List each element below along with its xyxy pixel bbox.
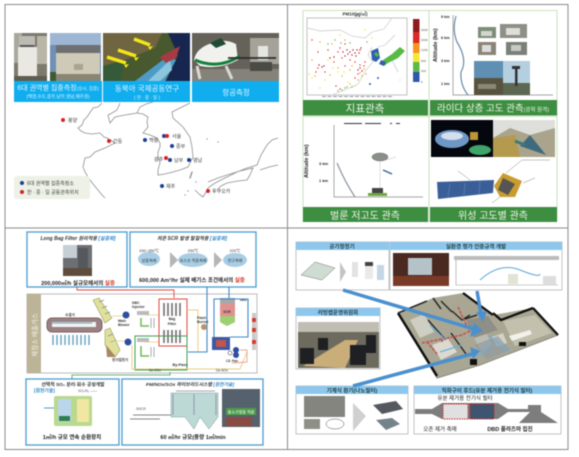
map: station markers: 영남	[193, 157, 203, 164]
box: low temperature SCR	[130, 232, 256, 287]
box: low temperature SCR: 220℃	[230, 248, 240, 253]
map: station markers: 제주	[166, 183, 176, 190]
box: long bag filter: 200,000㎥/h 실규모에서의 실증	[41, 279, 115, 287]
sinter machine: 전기집진기	[112, 357, 128, 362]
by-pass line: De-SOx	[149, 368, 161, 372]
burner and blue lines: Burner	[197, 320, 209, 324]
blowers and ducts	[112, 301, 159, 357]
label: surface observation: 지표관측	[346, 103, 385, 115]
bag filter	[159, 299, 187, 346]
label: six regional sites: (백령,수도,중부,남부,영남,제주권)	[26, 93, 90, 100]
box: air cleaner	[296, 242, 389, 290]
panel: indoor air quality	[296, 242, 562, 434]
box: selective SO2 separation: SO₂/N₂ ——	[78, 389, 98, 393]
illustration: apartment floor plan	[398, 293, 558, 378]
blowers and ducts: Main	[118, 319, 126, 323]
arrow head	[470, 347, 480, 359]
SCR reactor: SCR	[223, 310, 231, 314]
box: long bag filter: Long Bag Filter 원리적용 [실증화]	[40, 235, 116, 242]
box: PM NOx SOx hybrid dust collector: 60 ㎥/hr 규모(풍량 1㎥/min	[160, 433, 226, 441]
legend: PM colour scale: 1200	[421, 48, 428, 52]
blowers and ducts: Injector	[132, 305, 145, 309]
box: low temperature SCR: 상용촉매	[142, 257, 157, 263]
label: lidar upper-altitude observation: 라이다 상층 고도 관측(광학 원격)	[437, 104, 549, 114]
photo: measurement station tower	[14, 33, 47, 81]
legend: PM colour scale: 500	[421, 59, 426, 63]
map: station markers: 서울	[172, 133, 182, 140]
panel: observation methods	[303, 10, 557, 222]
arrow: bag filter feed	[77, 287, 174, 298]
legend	[14, 176, 90, 199]
box: low temperature SCR: 포스코 적용촉매	[180, 257, 207, 263]
box: real environment evaluation standard	[390, 242, 562, 290]
box: mechanical ventilation nanofilter: 기계식 환기(나노필터)	[327, 386, 378, 394]
legend: PM colour scale: 0	[421, 80, 423, 84]
arrow: air cleaner to plan	[343, 290, 474, 329]
box: mechanical ventilation nanofilter	[296, 386, 408, 434]
map: station markers: 광주	[154, 156, 164, 163]
chart: balloon altitude profile: Altitude (km)	[304, 144, 310, 178]
box: selective SO2 separation	[26, 372, 170, 445]
box: air cleaner: 공기청정기	[329, 242, 355, 250]
chart: balloon altitude profile: 3 km	[319, 161, 329, 166]
label: satellite observation: 위성 고도별 관측	[458, 209, 528, 222]
chart: surface PM map: PM10(㎍/㎥)	[342, 10, 368, 18]
box: low temperature SCR: 저온 SCR 발생 탈질적용 [실증화]	[157, 235, 227, 242]
sinter machine	[47, 298, 128, 362]
box: kitchen hood electric filter: DBD 플라즈마 집진	[487, 425, 533, 433]
label: East Asia joint research: ( 한 · 중 · 일 )	[134, 94, 160, 100]
box: low temperature SCR: 330~350℃	[139, 248, 159, 253]
by-pass line	[132, 310, 247, 372]
box: selective SO2 separation: 선택적 SO₂ 분리·회수 공정개발	[41, 381, 105, 388]
map: station markers	[61, 117, 231, 195]
box: kitchen hood electric filter: 직화구이 후드(유분 제거용 전기식 필터)	[442, 386, 533, 394]
photo: East Asia transport satellite map	[103, 33, 190, 81]
box: PM NOx SOx hybrid dust collector: 충소가열용 적용	[228, 408, 255, 414]
illustration: satellite	[437, 160, 550, 203]
box: selective SO2 separation: [원천기술]	[34, 387, 55, 394]
label: six regional sites: 6대 권역별 집중측정(상시, 집중)	[17, 83, 99, 92]
panel: observation network map	[14, 33, 279, 199]
box: living lab committee photo: 리빙랩운영위원회	[318, 308, 358, 316]
map: station markers: 봉양	[68, 117, 78, 124]
legend: PM colour scale	[413, 19, 428, 84]
box: low temperature SCR: 연구촉매	[228, 257, 243, 263]
box: living lab committee photo	[296, 308, 380, 369]
box: kitchen hood electric filter: 오존 제거 촉매	[423, 425, 457, 433]
label: airborne measurement: 항공측정	[222, 87, 250, 97]
box: low temperature SCR: 600,000 Am³/hr 실제 배기스 조건에서의 실증	[139, 276, 245, 284]
legend: PM colour scale: 200	[421, 69, 426, 73]
map: station markers: 후쿠오카	[212, 188, 231, 195]
map: station markers: 중부	[176, 144, 186, 150]
label: East Asia joint research	[103, 81, 190, 102]
label: balloon low-altitude observation: 벌룬 저고도 관측	[330, 210, 400, 222]
label: East Asia joint research: 동북아 국제공동연구	[115, 83, 179, 93]
arrow: evaluation to plan	[477, 291, 481, 314]
label: airborne measurement	[192, 81, 279, 102]
box: PM NOx SOx hybrid dust collector: PM/NOx/SOx 하이브리드시스템 [원천기술]	[146, 381, 234, 388]
images: satellite views	[431, 120, 555, 157]
box: PM NOx SOx hybrid dust collector	[122, 379, 263, 445]
box: PM NOx SOx hybrid dust collector: SNCR	[136, 407, 146, 411]
label: flue gas band: 제철소 배출가스	[30, 313, 39, 357]
map: station markers: 남부	[174, 157, 184, 164]
bag filter: Bag	[169, 317, 175, 321]
box: real environment evaluation standard: 실환경 평가 인증규격 개발	[446, 242, 506, 250]
SCR reactor: I.D. Fan	[226, 359, 238, 363]
arrow head	[476, 311, 487, 322]
blowers and ducts: Blower	[118, 323, 130, 327]
box: kitchen hood electric filter: 유분 제거용 전기식 필터	[437, 394, 493, 402]
label: lidar upper-altitude observation	[430, 100, 557, 116]
legend: 한 · 중 · 일 공동관측위치	[27, 189, 79, 196]
sinter machine: 소결기	[65, 312, 75, 317]
legend: PM colour scale: 2000	[421, 38, 428, 42]
chart: lidar altitude profile: Altitude (km)	[433, 28, 439, 62]
burner and blue lines	[188, 287, 248, 352]
box: low temperature SCR: 250℃	[188, 248, 198, 253]
photos: lidar sites	[474, 24, 530, 95]
label: surface observation	[303, 100, 428, 116]
bag filter: Filter	[168, 322, 177, 326]
chart: lidar altitude profile	[433, 15, 553, 95]
chart: lidar altitude profile: 1 km	[441, 82, 450, 86]
chart: lidar altitude profile: 9 km	[441, 15, 450, 19]
burner and blue lines: Flash	[197, 316, 206, 320]
chart: lidar altitude profile: 6 km	[441, 36, 450, 40]
photo: measurement container	[50, 33, 101, 81]
by-pass line: By-Pass	[172, 363, 188, 367]
label: satellite observation	[430, 207, 557, 222]
legend: 6대 권역별 집중측정소	[27, 180, 74, 187]
label: balloon low-altitude observation	[303, 207, 428, 222]
photo: research aircraft	[192, 33, 279, 81]
box: kitchen hood electric filter	[414, 386, 561, 434]
map: station markers: 백령	[149, 137, 158, 144]
blowers and ducts: DBC	[132, 301, 140, 305]
map: islands	[185, 139, 218, 195]
SCR reactor: NH3	[240, 298, 247, 302]
chart: lidar altitude profile: 3 km	[441, 59, 450, 63]
chart: balloon altitude profile	[304, 124, 423, 197]
label: flue gas band	[27, 294, 41, 373]
label: six regional sites	[14, 81, 102, 102]
chart: balloon altitude profile: 1 km	[319, 178, 329, 183]
SCR reactor	[212, 298, 256, 363]
chart: surface PM map	[307, 10, 407, 96]
box: selective SO2 separation: 1㎥/h 규모 연속 순환장치	[43, 433, 101, 441]
by-pass line: De-NOx	[216, 368, 228, 372]
map: station markers: 간둥	[113, 138, 123, 145]
panel: exhaust gas treatment process	[26, 232, 263, 445]
map: coastlines	[78, 102, 278, 198]
diagram: sintering flue gas flow	[27, 287, 257, 373]
legend: PM colour scale: 3000	[421, 28, 428, 32]
box: long bag filter	[27, 232, 127, 287]
arrow: ventilation to plan	[353, 354, 472, 386]
arrow head	[470, 323, 483, 337]
